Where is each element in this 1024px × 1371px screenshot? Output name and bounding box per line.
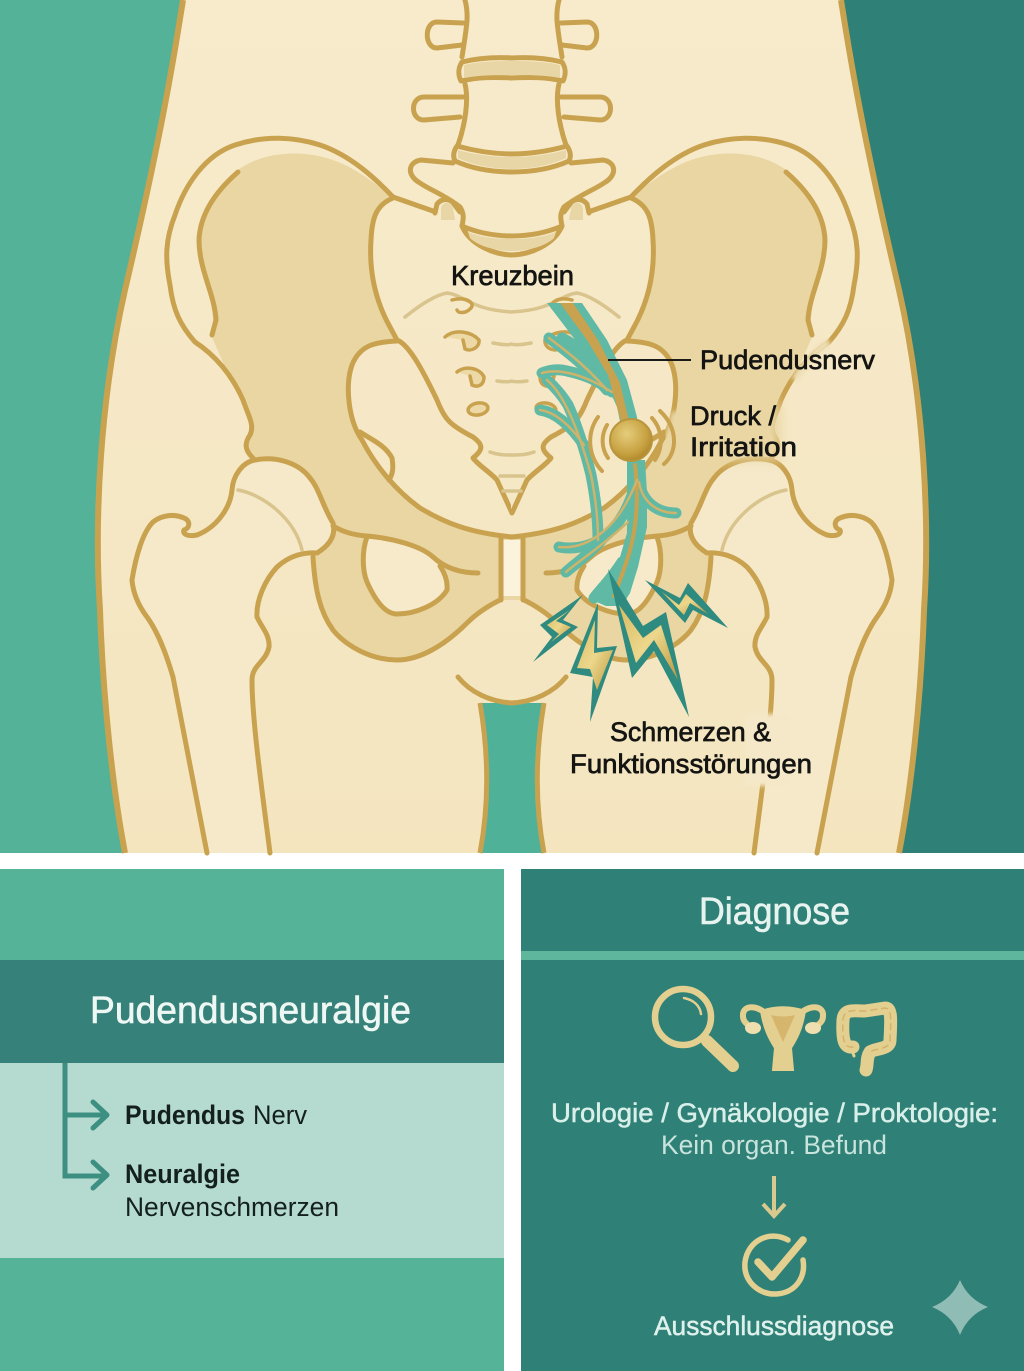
femur head top and lesser trochanter [252, 459, 334, 853]
term: Neuralgie: Neuralgie [125, 1159, 240, 1189]
icon: check [745, 1236, 803, 1294]
acetabulum lower rim [313, 557, 500, 660]
label: Schmerzen & Funktionsstörungen: Schmerzen & [610, 717, 771, 747]
sacral ridges [490, 343, 513, 491]
illustration: pelvis anatomy half, mirrored [98, 0, 513, 853]
femur fill [132, 459, 334, 853]
term: Pudendus Nerv: Nerv [253, 1100, 307, 1130]
sacral brim line [405, 293, 513, 317]
icon: sparkle star [932, 1280, 988, 1335]
label: Druck / Irritation: Druck / [690, 401, 776, 431]
sliver [360, 432, 393, 480]
text: no organic finding: Kein organ. Befund [661, 1130, 887, 1160]
label: Kreuzbein: Kreuzbein [451, 260, 574, 291]
ilium shaded area [199, 154, 513, 660]
nerve core gold lower [614, 465, 637, 596]
text: exclusion diagnosis: Ausschlussdiagnose [654, 1311, 894, 1341]
symphysis light [503, 540, 513, 596]
term: Nervenschmerzen: Nervenschmerzen [125, 1192, 339, 1222]
disc 1 outline [459, 58, 513, 81]
bolt center [570, 603, 617, 722]
divider [521, 951, 1024, 960]
pudendal nerve [540, 303, 676, 606]
disc fills [441, 61, 513, 251]
inner thigh outline [480, 703, 487, 853]
label halo patches [668, 342, 829, 786]
vertebra 1 [427, 0, 467, 57]
label: Druck / Irritation: Irritation [690, 432, 797, 462]
label: Schmerzen & Funktionsstörungen: Funktionsstörungen [570, 749, 812, 779]
disc 3 top [462, 226, 513, 236]
ilium inner line [199, 172, 238, 335]
bolt left [533, 595, 583, 662]
obturator rim [363, 537, 447, 614]
panel: Diagnose [521, 869, 1024, 1371]
main trunk teal upper [547, 303, 640, 445]
term: Pudendus Nerv: Pudendus [125, 1100, 245, 1130]
sacral wing [348, 341, 513, 537]
leader line Pudendusnerv [608, 359, 691, 361]
arrow: down [763, 1176, 785, 1216]
nerve core gold [560, 303, 630, 425]
symphysis line [498, 537, 504, 600]
body silhouette [98, 0, 513, 853]
disc 2 outline [454, 146, 513, 172]
foramina hooks [445, 299, 489, 417]
vertebra 2 [414, 84, 467, 145]
main trunk teal lower [592, 460, 647, 606]
definition band [0, 1063, 504, 1258]
femur head and greater trochanter [132, 460, 255, 853]
tree arrows [65, 1063, 107, 1188]
leg gap teal [470, 695, 554, 853]
label: Druck / Irritation [690, 401, 797, 462]
bolt large [608, 569, 689, 717]
pubic top line [333, 526, 478, 573]
obturator hole [363, 537, 447, 614]
pressure point [590, 411, 674, 471]
background right dark teal [512, 0, 1024, 853]
ilium outline [167, 138, 433, 460]
icon: uterus [743, 1007, 823, 1070]
panel: Pudendusneuralgie [0, 869, 504, 1371]
facet [435, 200, 460, 213]
pubic arch [458, 677, 513, 703]
femoral neck line [238, 490, 302, 550]
pressure waves [590, 411, 674, 471]
icon: magnifier [655, 989, 733, 1066]
label: Schmerzen & Funktionsstörungen [570, 717, 812, 779]
pain bolts [533, 569, 728, 722]
heading: Diagnose [699, 891, 850, 933]
bolt right [645, 580, 728, 628]
background left teal [0, 0, 512, 853]
nerve strands gold [540, 338, 676, 572]
heading: Pudendusneuralgie [90, 990, 411, 1032]
label: Pudendusnerv: Pudendusnerv [700, 345, 875, 375]
sacrum outline [371, 198, 512, 513]
nerve branches teal [540, 338, 676, 598]
text: specialties: Urologie / Gynäkologie / Proktologie: [551, 1098, 998, 1128]
vertebra 3 [410, 160, 513, 255]
heading band [0, 960, 504, 1063]
body outline [98, 0, 183, 853]
icon: colon [843, 1008, 891, 1070]
illustration: mirrored half [511, 0, 926, 853]
